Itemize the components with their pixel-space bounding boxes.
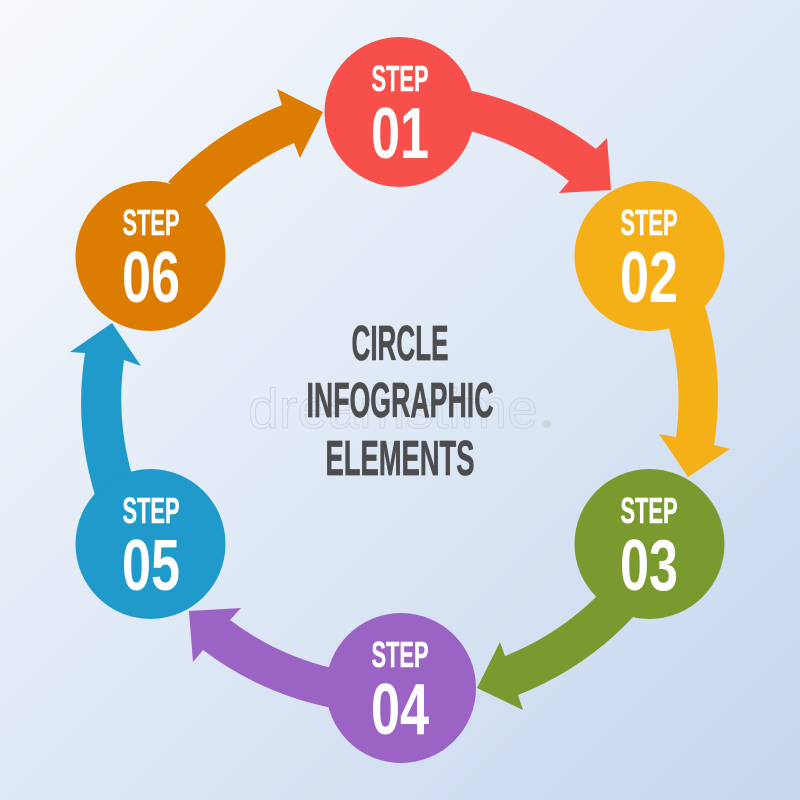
- step 01 badge: [324, 37, 474, 187]
- arrow: step 4 to 5: [189, 608, 332, 708]
- step 02 badge: [574, 181, 724, 331]
- step 02 badge: STEP: [620, 202, 678, 243]
- center title: CIRCLE: [352, 317, 448, 371]
- arrow: step 5 to 6: [70, 323, 141, 495]
- step 05 badge: 05: [122, 526, 180, 606]
- arrow: step 2 to 3: [659, 300, 730, 477]
- center title: ELEMENTS: [326, 432, 474, 486]
- step 03 badge: [574, 469, 724, 619]
- step 01 badge: 01: [371, 94, 429, 174]
- step 03 badge: 03: [620, 526, 678, 606]
- center title: INFOGRAPHIC: [306, 374, 494, 428]
- arrow: step 3 to 4: [477, 595, 635, 710]
- step 03 badge: STEP: [620, 490, 678, 531]
- watermark: dreamstime: [248, 377, 538, 440]
- center title: [306, 317, 494, 486]
- step 01 badge: STEP: [372, 58, 428, 99]
- step 02 badge: 02: [620, 238, 678, 318]
- step 04 badge: [326, 613, 476, 763]
- step 06 badge: 06: [122, 238, 180, 318]
- step 05 badge: [76, 469, 226, 619]
- step 06 badge: STEP: [122, 202, 180, 243]
- step 06 badge: [76, 181, 226, 331]
- arrow: step 1 to 2: [468, 90, 611, 193]
- step 05 badge: STEP: [122, 490, 180, 531]
- arrow: step 6 to 1: [168, 89, 323, 205]
- step 04 badge: 04: [371, 670, 429, 750]
- step 04 badge: STEP: [372, 634, 428, 675]
